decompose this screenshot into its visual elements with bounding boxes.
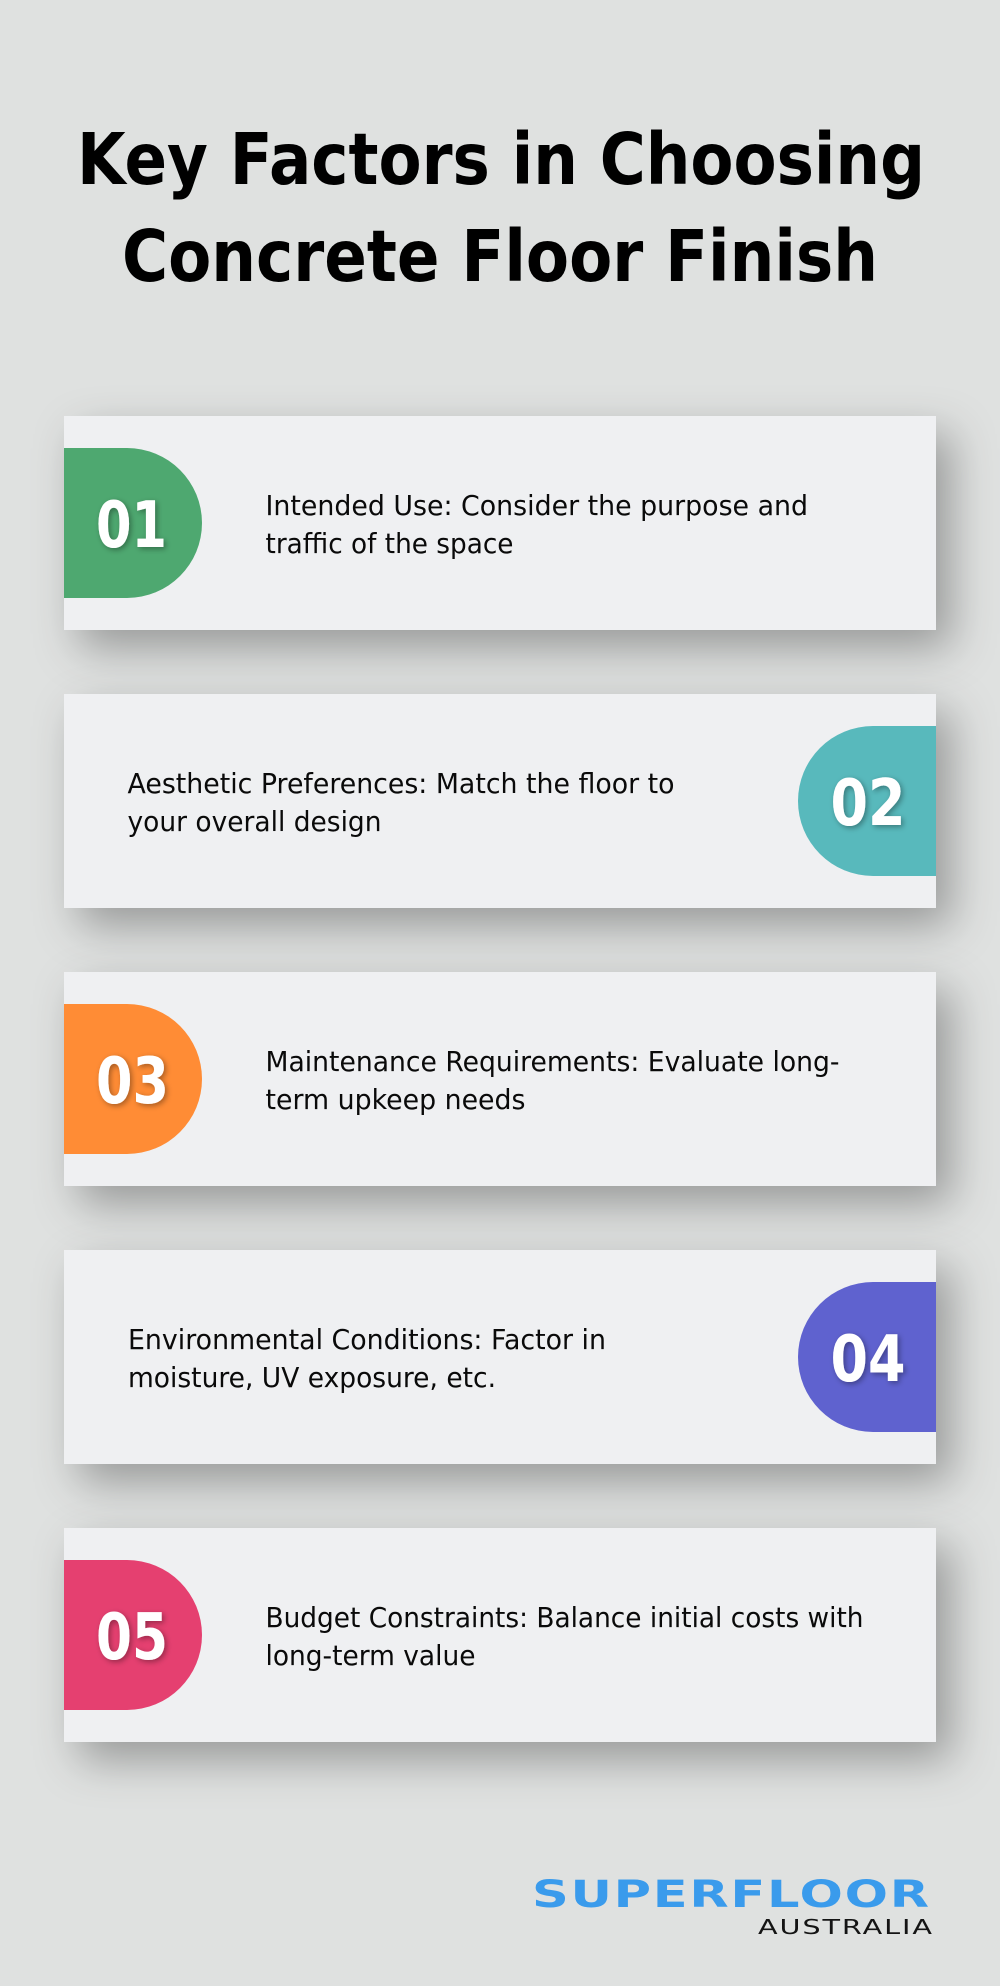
text: maintenance requirements: term upkeep needs	[266, 1085, 526, 1116]
number badge 03: 03	[96, 1045, 169, 1119]
text: budget constraints	[266, 1603, 864, 1672]
text: maintenance requirements: Maintenance Requirements: Evaluate long-	[266, 1047, 840, 1078]
panel: factor 05 budget constraints	[64, 1528, 936, 1742]
text: aesthetic preferences	[128, 769, 674, 838]
text: environmental conditions: moisture, UV exposure, etc.	[128, 1363, 496, 1394]
text: budget constraints: long-term value	[266, 1641, 476, 1672]
text: aesthetic preferences: Aesthetic Preferences: Match the floor to	[128, 769, 674, 800]
number badge 04	[798, 1282, 936, 1432]
text: intended use: Intended Use: Consider the purpose and	[266, 491, 808, 522]
number badge 05	[64, 1560, 202, 1710]
text: intended use	[266, 491, 808, 560]
panel: factor 03 maintenance requirements	[64, 972, 936, 1186]
number badge 02: 02	[830, 767, 906, 841]
number badge 03	[64, 1004, 202, 1154]
number badge 01: 01	[96, 489, 167, 563]
number badge 04: 04	[830, 1323, 906, 1397]
text: aesthetic preferences: your overall design	[128, 807, 382, 838]
panel: factor 01 intended use	[64, 416, 936, 630]
logo: Superfloor Australia: SUPERFLOOR	[532, 1873, 929, 1916]
number badge 05: 05	[96, 1601, 168, 1675]
title: Concrete Floor Finish	[122, 215, 878, 298]
text: environmental conditions	[128, 1325, 606, 1394]
number badge 02	[798, 726, 936, 876]
text: environmental conditions: Environmental Conditions: Factor in	[128, 1325, 606, 1356]
text: maintenance requirements	[266, 1047, 840, 1116]
logo: Superfloor Australia	[532, 1873, 932, 1939]
number badge 01	[64, 448, 202, 598]
text: budget constraints: Budget Constraints: Balance initial costs with	[266, 1603, 864, 1634]
panel: factor 04 environmental conditions	[64, 1250, 936, 1464]
panel: factor 02 aesthetic preferences	[64, 694, 936, 908]
text: intended use: traffic of the space	[266, 529, 514, 560]
logo: Superfloor Australia: AUSTRALIA	[758, 1915, 932, 1939]
title	[77, 118, 925, 298]
